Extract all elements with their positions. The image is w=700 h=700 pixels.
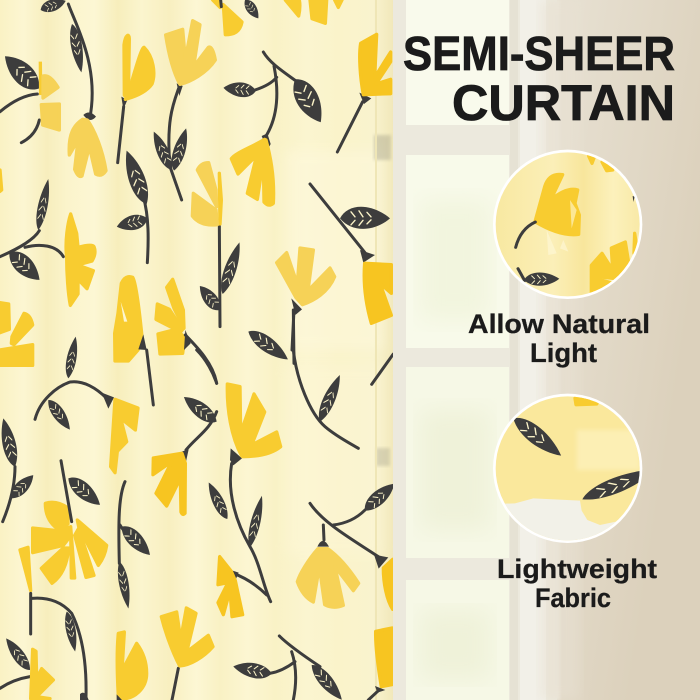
flower: top edge right — [285, 0, 342, 23]
flower: centre lower — [156, 279, 217, 383]
flower sprig: top left hanging — [39, 0, 106, 176]
flower sliver: left edge — [0, 170, 2, 191]
leaf sprig: centre lower — [117, 480, 150, 608]
title: CURTAIN — [452, 75, 675, 131]
leaf sprig: centre left — [116, 150, 150, 264]
window — [392, 0, 580, 700]
title — [403, 28, 675, 131]
flower sprig: lower left large fan — [33, 461, 107, 583]
flower sprig: centre yellow with leaf — [153, 391, 221, 514]
label: lightweight fabric: Lightweight — [497, 554, 657, 584]
flower sprig: long stem right — [293, 350, 393, 448]
title: SEMI-SHEER — [403, 28, 675, 81]
flower sprig: right edge — [310, 184, 391, 323]
flower: bottom left of centre — [117, 632, 147, 700]
detail circle: lightweight fabric — [493, 394, 642, 543]
flower: top edge centre — [213, 0, 263, 35]
floral pattern: lower half — [0, 350, 399, 700]
flower sprig: bottom left — [0, 547, 89, 700]
flower sprig: tall centre right — [204, 384, 281, 602]
flower: bottom right edge — [368, 628, 392, 700]
detail circle: allow natural light — [493, 150, 643, 300]
flower sprig: hanging right — [297, 478, 399, 609]
flower: tall two petal — [118, 35, 154, 163]
flower sprig: left edge — [0, 49, 59, 143]
label: allow natural light — [468, 309, 650, 368]
label: allow natural light: Allow Natural — [468, 309, 650, 339]
leaves: bottom of upper half — [63, 310, 294, 379]
curtain panel — [0, 0, 399, 700]
flower sprig: bottom right stems — [232, 636, 347, 700]
flower sprig: centre — [192, 163, 245, 327]
flower sprig: centre right — [223, 52, 331, 205]
label: allow natural light: Light — [530, 338, 597, 368]
flower sprig: lower right — [277, 248, 335, 350]
label: lightweight fabric — [497, 554, 657, 613]
flower: centre left lower — [115, 277, 147, 361]
flower sprig: top centre — [148, 21, 215, 200]
flower sprig: small lower centre — [218, 557, 267, 617]
flower sprig: upper right edge — [337, 34, 391, 152]
leaf sprig: left edge — [1, 418, 34, 524]
flower sprig: left middle — [0, 178, 95, 305]
wall background — [390, 0, 700, 700]
floral pattern: upper half — [0, 0, 391, 383]
flower sprig: left of centre — [35, 350, 217, 473]
flower: left edge lower — [0, 303, 33, 365]
flower: lower centre — [161, 608, 213, 700]
label: lightweight fabric: Fabric — [535, 583, 611, 613]
